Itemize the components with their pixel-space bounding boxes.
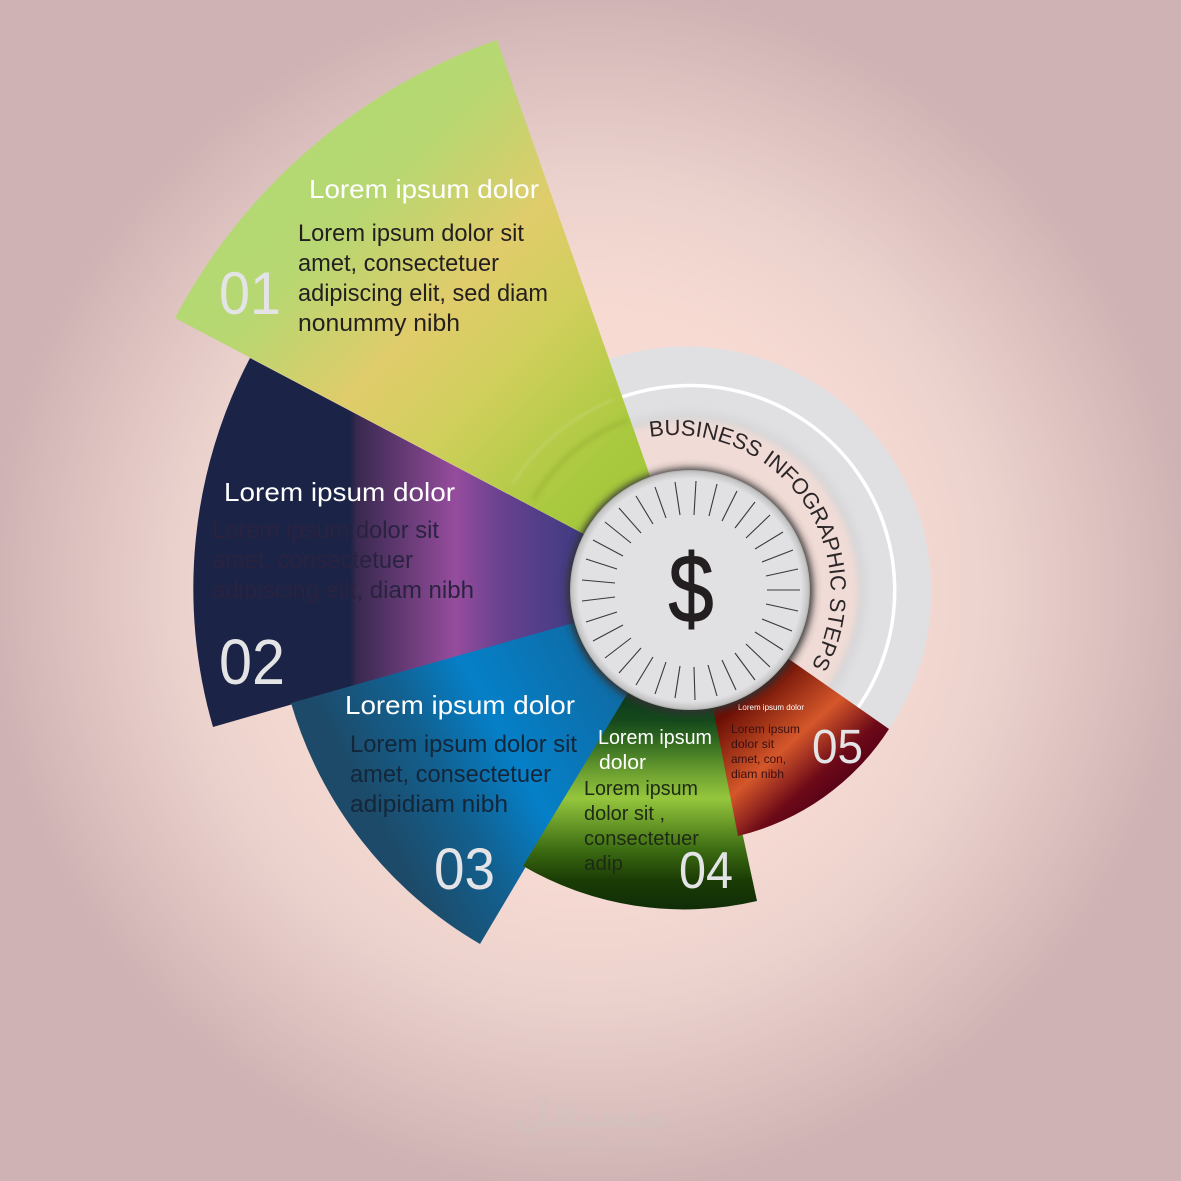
body 04: Lorem ipsum bbox=[584, 778, 698, 800]
body 05: amet, con, bbox=[731, 752, 786, 766]
center dial bbox=[567, 468, 813, 714]
wedge 01 bbox=[175, 40, 690, 590]
body 02: amet, consectetuer bbox=[212, 547, 413, 574]
body 03: adipidiam nibh bbox=[350, 791, 508, 818]
curved title: business infographic steps: BUSINESS INFOGRAPHIC STEPS bbox=[650, 420, 846, 670]
body 02: Lorem ipsum dolor sit bbox=[212, 517, 439, 544]
body 05: dolor sit bbox=[731, 737, 775, 751]
wedge 04 bbox=[523, 590, 757, 909]
body 02 bbox=[212, 517, 474, 604]
body 01 bbox=[298, 220, 548, 337]
body 01: nonummy nibh bbox=[298, 310, 460, 337]
body 04: consectetuer bbox=[584, 828, 699, 850]
wedge 05 bbox=[690, 590, 889, 836]
body 01: adipiscing elit, sed diam bbox=[298, 280, 548, 307]
number 05: 05 bbox=[812, 721, 863, 774]
body 03 bbox=[350, 731, 577, 818]
title 02: Lorem ipsum dolor bbox=[224, 477, 455, 507]
body 03: Lorem ipsum dolor sit bbox=[350, 731, 577, 758]
title 04 bbox=[598, 727, 712, 774]
body 05: diam nibh bbox=[731, 767, 784, 781]
title 04: dolor bbox=[599, 752, 646, 774]
watermark: مستقل bbox=[513, 1088, 667, 1137]
wedge 02 bbox=[193, 358, 690, 727]
number 04: 04 bbox=[679, 842, 733, 900]
body 01: Lorem ipsum dolor sit bbox=[298, 220, 524, 247]
grey outer ring bbox=[606, 346, 931, 729]
title 04: Lorem ipsum bbox=[598, 727, 712, 749]
title 03: Lorem ipsum dolor bbox=[345, 690, 575, 720]
number 01: 01 bbox=[219, 260, 281, 327]
body 01: amet, consectetuer bbox=[298, 250, 499, 277]
body 02: adipiscing elit, diam nibh bbox=[212, 577, 474, 604]
body 04 bbox=[584, 778, 699, 875]
body 04: adip bbox=[584, 853, 623, 875]
number 02: 02 bbox=[219, 626, 285, 698]
body 03: amet, consectetuer bbox=[350, 761, 551, 788]
body 05 bbox=[731, 722, 800, 781]
dial ticks bbox=[582, 481, 800, 700]
body 04: dolor sit , bbox=[584, 803, 665, 825]
pink inner band bbox=[511, 413, 865, 767]
watermark: mostaql.com bbox=[520, 1135, 660, 1151]
dollar sign: $ bbox=[668, 534, 714, 643]
wedge 03 bbox=[291, 590, 690, 944]
body 05: Lorem ipsum bbox=[731, 722, 800, 736]
white ring line bbox=[622, 385, 895, 709]
title 01: Lorem ipsum dolor bbox=[309, 174, 539, 204]
number 03: 03 bbox=[434, 837, 495, 902]
title 05: Lorem ipsum dolor bbox=[738, 703, 804, 712]
